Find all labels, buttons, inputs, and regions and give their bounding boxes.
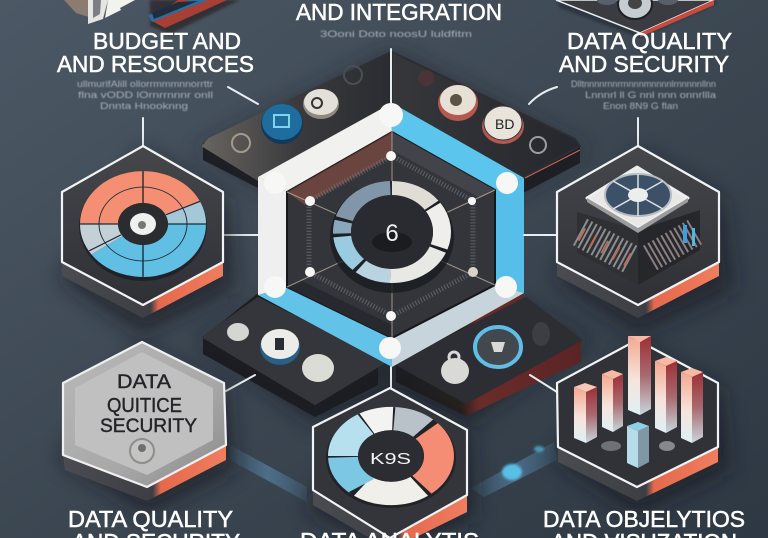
caption: data quality and security: Enon 8N9 G flan [603, 101, 678, 111]
ring segment: top right cyan [392, 103, 524, 190]
panel: data quality badge hexagon [60, 342, 235, 515]
connector band: lower right [471, 442, 557, 497]
panel: bottom right slab [396, 295, 581, 416]
icon: small link [530, 137, 546, 153]
inner hexagon [287, 132, 495, 338]
small marks [601, 441, 621, 451]
ring segment: right cyan [495, 178, 524, 293]
illustration: books and budget items at top left [64, 0, 240, 34]
icon: server cube [577, 167, 700, 285]
panel: bar chart hexagon [555, 336, 730, 515]
badge seal [130, 439, 154, 463]
bar 1 [574, 383, 597, 443]
panel: bottom left slab [203, 290, 378, 417]
icon: faded red badge [418, 70, 434, 86]
connector band: lower left [230, 445, 307, 502]
ring segment: bottom left cyan [258, 287, 392, 367]
icon: white button [260, 329, 300, 365]
icon: cyan ring button [475, 327, 521, 367]
icon: light button [303, 89, 339, 119]
caption: budget and resources [77, 79, 213, 111]
badge label [100, 372, 197, 437]
chart: KPI donut: K9S [370, 451, 411, 468]
bar 4 [655, 357, 677, 433]
icon: blue button [261, 104, 303, 144]
centre dial [321, 171, 463, 293]
chart: isometric bars [574, 336, 703, 468]
heading: budget and resources: AND RESOURCES [57, 51, 254, 77]
bar 6 short [627, 422, 649, 468]
heading: budget and resources [57, 28, 254, 77]
icon: faded lock [232, 134, 250, 152]
icons: bottom left slab buttons [227, 323, 334, 382]
caption: data quality and security: Lnnnrl ll G nnl nnn onnrllla [585, 90, 716, 100]
ring segment: left white [258, 177, 287, 295]
bar 2 [602, 370, 623, 432]
heading: data quality and security [559, 28, 732, 77]
caption: budget and resources: flna vODD lOrnrrnnnr onll [78, 90, 213, 100]
caption: data quality and security: Dlltnnnnrnnrrnnnnmnnnnlrnnnnnllnn [571, 79, 716, 89]
chart: KPI donut [323, 403, 459, 509]
panel: KPI hexagon [305, 388, 475, 538]
icon: round badge [302, 354, 334, 382]
bar 3 [628, 336, 651, 415]
panels: slabs behind the centre hexagon [195, 48, 590, 425]
icon: BD button: BD [495, 116, 514, 132]
heading: data objectives and visualization: DATA OBJELYTIOS [543, 506, 745, 532]
icon: lock badge [441, 352, 469, 384]
icons: top left slab buttons [232, 66, 362, 152]
caption: integration: 3Ooni Doto noosU luldfitm [320, 29, 472, 39]
panel: top right slab [392, 60, 580, 192]
connectors [143, 49, 638, 392]
hexagon: centre [258, 103, 524, 367]
spokes [287, 115, 495, 348]
ring segment: top left white [258, 103, 392, 192]
heading: data quality and security lower: DATA QUALITY [68, 506, 233, 532]
icon: faded badge [532, 322, 550, 346]
nodes [264, 103, 518, 359]
bar 5 [681, 368, 703, 443]
icons: bottom right slab buttons [441, 322, 550, 384]
caption: budget and resources: ullmurifAlill ollorrmmmnnorrttr [77, 79, 213, 89]
icons: top right slab buttons [418, 70, 546, 153]
ring segment: bottom right grey [392, 285, 524, 367]
icon: small badge [227, 323, 249, 341]
badge label: SECURITY [100, 416, 197, 437]
illustration: hexagon fragment at top right [556, 0, 716, 38]
caption: data quality and security [571, 79, 716, 111]
heading: budget and resources: BUDGET AND [93, 28, 241, 54]
dotted inner guide [309, 156, 473, 316]
chart: budget donut [79, 171, 207, 281]
panel: top left slab [203, 60, 392, 190]
centre dial: 6 [385, 220, 399, 247]
badge label: QUITICE [107, 395, 182, 417]
panel: data security hexagon [555, 146, 735, 335]
icon: beige button [438, 85, 478, 121]
panel: budget hexagon [60, 146, 235, 335]
icon: faded badge [344, 66, 362, 84]
badge label: DATA [117, 372, 171, 393]
heading: data quality and security: AND SECURITY [559, 51, 729, 77]
heading: data quality and security: DATA QUALITY [567, 28, 732, 54]
caption: budget and resources: Dnnta Hnooknng [100, 101, 188, 111]
